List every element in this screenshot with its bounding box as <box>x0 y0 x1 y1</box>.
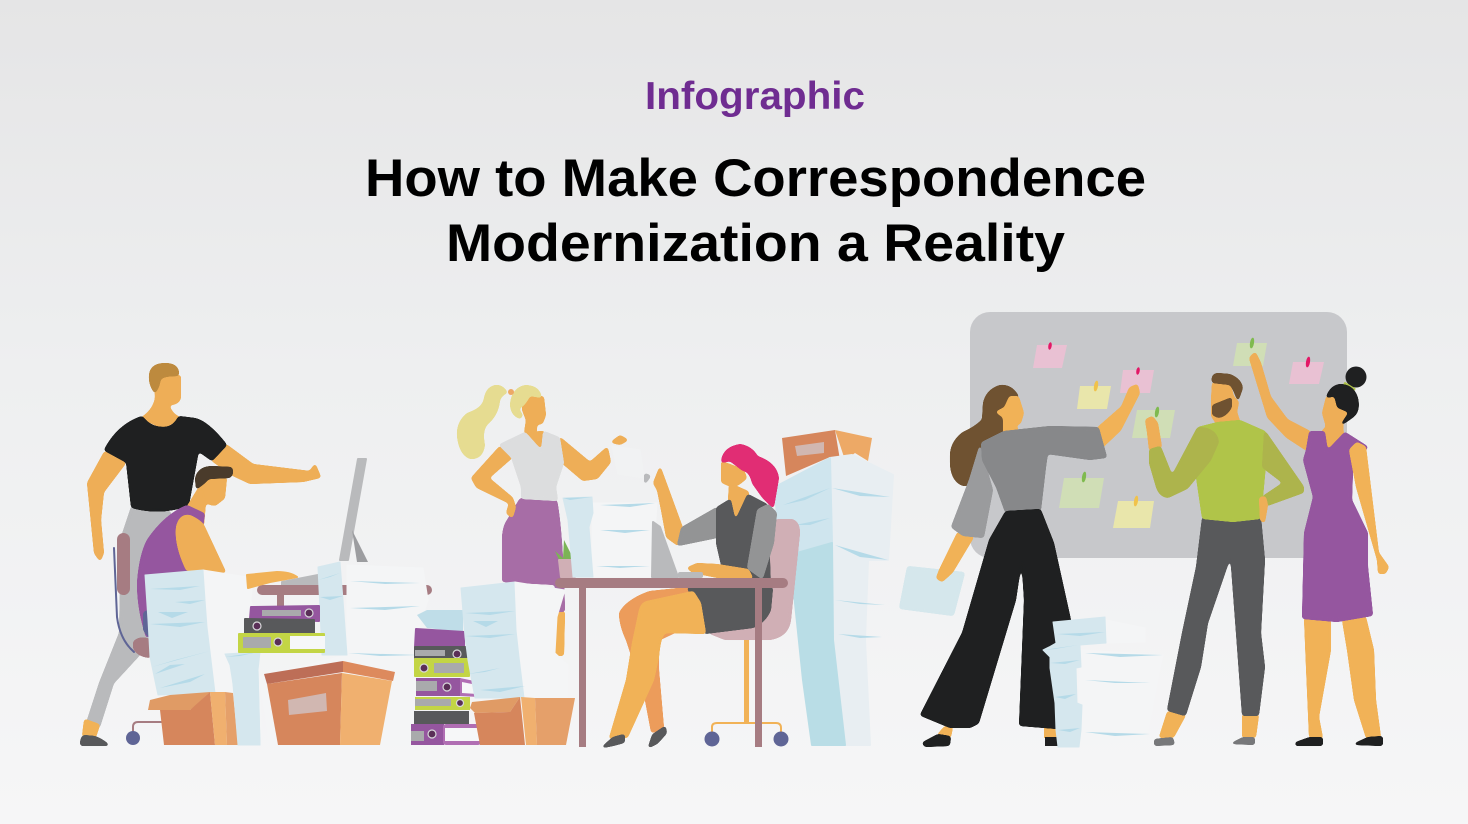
blue papers above right binders <box>417 610 463 632</box>
binders stack, right <box>411 629 481 745</box>
cardboard box, left open <box>148 692 238 745</box>
title: Modernization a Reality <box>446 214 1066 273</box>
figure: office chair, left <box>114 533 162 745</box>
paper stack, large blue left <box>145 570 215 695</box>
white paper pile, left centre <box>203 565 428 745</box>
cardboard box, centre closed <box>264 661 395 745</box>
paper stack, lower right <box>1043 617 1163 747</box>
figure: bearded man in green sweater <box>1146 373 1303 746</box>
cardboard box, right of binders <box>470 697 575 745</box>
figure: seated man in purple vest <box>134 466 233 657</box>
paper stack, centre tall <box>461 582 568 698</box>
panel: sticky note board <box>970 312 1347 558</box>
figure: seated woman, chair behind <box>603 445 799 747</box>
figure: woman in purple dress with hair bun <box>1250 353 1388 745</box>
figure: woman with long brown hair <box>900 385 1139 746</box>
paper stack, blue behind monitor <box>318 562 420 656</box>
paper stack on desk <box>563 446 657 577</box>
subtitle: Infographic: Infographic <box>645 75 865 118</box>
desk <box>555 578 788 747</box>
paper stack, narrow blue <box>225 652 260 745</box>
title: How to Make Correspondence <box>365 149 1146 208</box>
title <box>365 149 1146 273</box>
paper stack on left box edge, blue front <box>232 670 260 745</box>
binders stack, left <box>238 606 325 653</box>
figure: standing man in black shirt <box>81 363 320 745</box>
figure: standing blonde woman <box>457 385 627 655</box>
hand on keyboard <box>247 572 297 588</box>
sticky notes <box>1033 337 1324 528</box>
tall paper stack with box on top <box>775 430 893 745</box>
plant <box>555 540 575 577</box>
figure: desktop computer and small desk <box>257 459 432 607</box>
laptop <box>652 522 703 578</box>
